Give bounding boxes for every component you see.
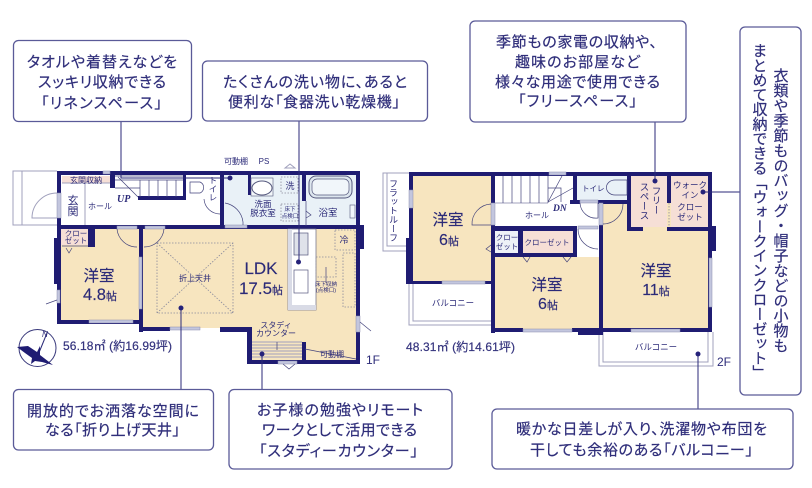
icon: compass: N: [42, 330, 48, 339]
room labels 1F: 可動棚: [224, 156, 248, 166]
room labels 2F: 2F: [717, 355, 731, 369]
toilet 1F: [190, 182, 204, 193]
room labels 2F: フリー: [650, 186, 660, 214]
callout: study counter: お子様の勉強やリモート: [257, 402, 423, 419]
area: 2F: 48.31㎡ (約14.61坪): [406, 339, 515, 354]
room labels 1F: カウンター: [256, 329, 296, 338]
callout: free space: 趣味のお部屋など: [515, 54, 641, 71]
right balcony: [599, 332, 713, 366]
room labels 1F: 床下収納: [315, 280, 337, 288]
room labels 2F: クローゼット: [524, 237, 570, 247]
icon: compass: [17, 330, 56, 366]
room labels 1F: 4.8帖: [83, 286, 117, 304]
callout: linen space: [14, 40, 192, 122]
room labels 2F: クロー: [496, 233, 518, 242]
leader lines and dots: [121, 121, 740, 409]
callout: folded ceiling: 開放的でお洒落な空間に: [27, 403, 199, 420]
callout: free space: 「フリースペース」: [518, 93, 637, 110]
room labels 2F: 洋室: [531, 276, 563, 294]
callout: walk-in closet: まとめて収納できる「ウォークインクローゼット」: [750, 43, 768, 380]
room labels 1F: 点検口: [282, 212, 298, 220]
room labels 2F: フラットルーフ: [388, 179, 398, 242]
room labels 2F: トイレ: [582, 184, 604, 193]
room labels 1F: トイレ: [208, 176, 218, 202]
room labels 2F: クロー: [677, 202, 703, 212]
callout: balcony: [492, 409, 793, 469]
room labels 2F: 6帖: [538, 296, 558, 313]
room labels 2F: スペース: [638, 182, 649, 220]
room labels 1F: 冷: [339, 234, 349, 245]
room labels 1F: 洋室: [83, 267, 115, 285]
room labels 1F: 17.5帖: [239, 279, 283, 298]
room labels 1F: 脱衣室: [250, 208, 276, 218]
room floors: [61, 229, 139, 321]
room labels 2F: DN: [552, 204, 568, 214]
callout: balcony: 暖かな日差しが入り、洗濯物や布団を: [516, 421, 767, 438]
room labels 2F: ウォーク: [673, 180, 707, 190]
room labels 2F: 11帖: [642, 282, 670, 299]
room labels 1F: (点検口): [316, 286, 336, 294]
floor plan: 1F: [13, 156, 380, 369]
doors and partitions: [32, 183, 110, 225]
room labels 1F: PS: [259, 157, 269, 166]
room labels 2F: ゼット: [496, 241, 518, 251]
callout: linen space: スッキリ収納できる: [38, 74, 166, 91]
callout: free space: 季節もの家電の収納や、: [496, 34, 657, 51]
room labels 2F: バルコニー: [635, 342, 677, 352]
callout: balcony: 干しても余裕のある「バルコニー」: [530, 442, 753, 459]
callout: folded ceiling: なる「折り上げ天井」: [45, 422, 180, 439]
room labels 2F: 6帖: [439, 232, 459, 249]
callout: folded ceiling: [14, 390, 214, 450]
walls: [409, 172, 712, 176]
callout: linen space: タオルや着替えなどを: [27, 54, 177, 71]
study counter: [252, 342, 302, 357]
callout: study counter: ワークとして活用できる: [262, 422, 417, 439]
callout: free space: 様々な用途で使用できる: [495, 74, 660, 91]
room labels 2F: ゼット: [677, 212, 703, 222]
callout: dishwasher: [202, 61, 428, 121]
callout: walk-in closet: 衣類や季節ものバッグ・帽子などの小物も: [772, 68, 788, 353]
callout: free space: [470, 21, 686, 122]
room labels 2F: イン: [681, 190, 699, 200]
room labels 1F: 洗面: [254, 199, 272, 209]
room labels 1F: 床下: [284, 206, 296, 213]
left balcony: [409, 284, 491, 325]
room labels 1F: UP: [117, 194, 131, 205]
room labels 1F: 玄: [68, 194, 78, 207]
room labels 1F: [65, 156, 380, 367]
windows: [89, 320, 133, 323]
room labels 2F: ホール: [525, 211, 549, 220]
room labels 2F: 洋室: [432, 211, 464, 229]
callout: linen space: 「リネンスペース」: [41, 95, 162, 112]
callout: study counter: 「スタディーカウンター」: [259, 442, 418, 460]
stairs: [115, 176, 183, 197]
room labels 1F: 折上天井: [179, 273, 211, 283]
callout: dishwasher: 便利な「食器洗い乾燥機」: [228, 94, 400, 111]
bathroom fixtures: [309, 176, 352, 198]
room floors: [413, 176, 491, 281]
walls: [57, 171, 360, 175]
room labels 1F: スタディ: [260, 320, 292, 330]
doors and stairs: [472, 204, 491, 225]
windows: [442, 281, 485, 284]
room labels 2F: 洋室: [640, 262, 672, 280]
room labels 1F: ゼット: [65, 235, 87, 245]
floor plan: 2F: [383, 172, 731, 369]
room labels 2F: [388, 179, 731, 369]
room labels 1F: 関: [68, 205, 78, 218]
room labels 1F: LDK: [244, 259, 278, 278]
closet door marks: [486, 245, 571, 262]
room labels 2F: バルコニー: [432, 298, 474, 308]
room labels 1F: クロー: [65, 229, 87, 238]
room labels 1F: 浴室: [318, 207, 338, 219]
room labels 1F: 可動棚: [320, 349, 344, 359]
entrance porch: [13, 171, 57, 225]
callout: study counter: [229, 390, 452, 469]
room labels 1F: 玄関収納: [70, 175, 102, 185]
kitchen counter: [288, 229, 316, 310]
room labels 1F: 洗: [285, 180, 295, 191]
callout: dishwasher: たくさんの洗い物に、あると: [223, 74, 407, 91]
dotted outlines: [157, 243, 233, 313]
area: 1F: 56.18㎡ (約16.99坪): [63, 338, 172, 353]
flat roof: [383, 173, 409, 251]
room labels 1F: 1F: [366, 353, 380, 367]
room labels 1F: ホール: [88, 202, 112, 211]
callout: walk-in closet: [740, 27, 801, 395]
